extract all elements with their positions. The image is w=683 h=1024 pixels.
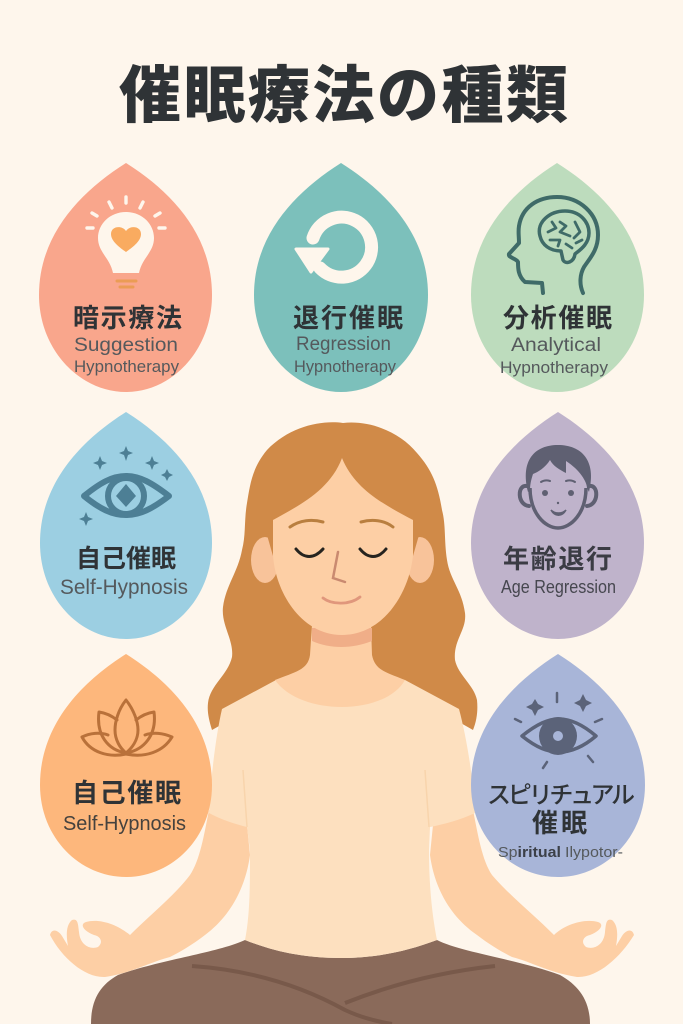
- drop: [471, 654, 645, 877]
- heading: 自己催眠: [76, 545, 176, 573]
- english label: Self-Hypnosis: [63, 813, 186, 835]
- drop: [40, 412, 212, 639]
- face: [273, 458, 413, 635]
- neck: [275, 625, 405, 707]
- panel: age regression: [471, 412, 644, 639]
- english label: Spiritual: [498, 844, 561, 861]
- english label: Regression: [296, 334, 391, 355]
- hair: [208, 422, 477, 730]
- heading: 催眠: [532, 808, 587, 838]
- english label: Age Regression: [501, 577, 616, 597]
- icon: head with brain: [509, 197, 598, 293]
- drop: [471, 163, 644, 392]
- drop: [254, 163, 428, 392]
- heading: 分析催眠: [503, 303, 612, 333]
- english label: Hypnotherapy: [294, 358, 397, 376]
- panel: regression hypnotherapy: [254, 163, 428, 392]
- drop: [39, 163, 212, 392]
- icon: light bulb with heart: [87, 197, 165, 287]
- icon: eye with rays: [515, 693, 602, 768]
- heading: 自己催眠: [72, 778, 181, 808]
- heading: 暗示療法: [73, 303, 182, 333]
- ears: [251, 537, 434, 583]
- left arm and hand: [50, 810, 250, 977]
- facial features: [290, 520, 393, 603]
- panel: analytical hypnotherapy: [471, 163, 644, 392]
- title: 催眠療法の種類: [119, 62, 568, 131]
- right arm and hand: [430, 810, 634, 977]
- icon: lotus: [82, 700, 172, 755]
- english label: Hypnotherapy: [74, 358, 180, 376]
- english label: Hypnotherapy: [500, 359, 609, 377]
- english label: Self-Hypnosis: [60, 576, 188, 599]
- crossed legs: [91, 940, 590, 1024]
- heading: スピリチュアル: [487, 782, 635, 809]
- english label: Suggestion: [74, 335, 178, 356]
- hair wedges over ears: [267, 520, 419, 556]
- panel: spiritual hypnosis: [471, 654, 645, 877]
- icon: eye with sparkles: [79, 446, 173, 526]
- heading: 年齢退行: [503, 544, 612, 574]
- icon: child face: [520, 445, 596, 528]
- english label: Analytical: [511, 335, 601, 356]
- heading: 退行催眠: [293, 303, 403, 333]
- icon: circular arrow: [296, 217, 372, 277]
- panel: self-hypnosis blue: [40, 412, 212, 639]
- drop: [40, 654, 212, 877]
- panel: self-hypnosis orange: [40, 654, 212, 877]
- drop: [471, 412, 644, 639]
- english label: Ilypotor-: [565, 844, 623, 861]
- shirt: [209, 680, 475, 958]
- illustration: meditating woman: [50, 422, 634, 1024]
- panel: suggestion hypnotherapy: [39, 163, 212, 392]
